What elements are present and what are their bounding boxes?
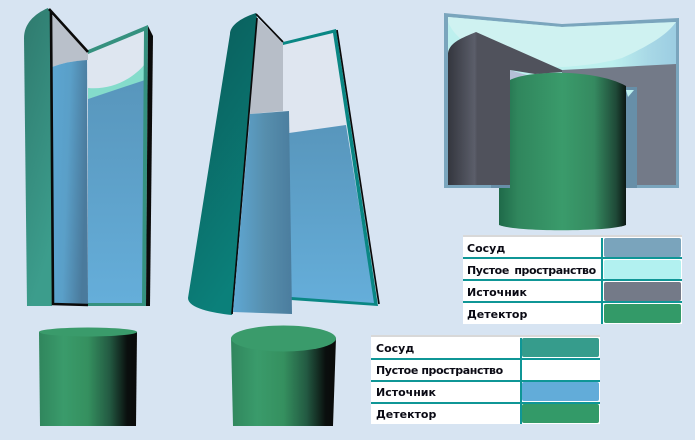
vessel outer curved wall [24,8,52,306]
source: back panel [289,125,375,304]
row: source [376,382,599,401]
vessel black edge right [146,26,153,306]
row: empty space: Пустое пространство [467,264,596,277]
source left dark [448,32,562,185]
source: front section [233,111,292,314]
vessel outer curved wall [188,13,257,315]
vessel bottom strip [491,185,510,188]
empty space: back corner [51,14,88,67]
vessel blue-grey inner strip [620,87,637,188]
detector lower body [499,188,626,230]
detector middle cylinder [231,326,336,426]
legend lower [371,335,600,424]
row: vessel [467,238,681,257]
vessel frame [283,29,378,306]
row: empty space [467,260,681,279]
detector upper body [510,73,626,188]
empty space: right panel [283,33,346,133]
source: right panel [88,80,145,303]
empty space: right panel [88,31,145,88]
source: front curved section [52,60,88,304]
empty space sliver [626,90,634,97]
row: vessel [376,338,599,357]
detector left cylinder [39,328,137,426]
legend upper [463,235,682,324]
source right [562,64,676,185]
vessel black edges [49,9,88,305]
figure: right view with detector [444,13,679,230]
vessel frame right [88,25,148,306]
row: vessel: Сосуд [376,342,414,355]
row: detector [376,404,599,423]
row: empty space: Пустое пространство [376,364,503,377]
vessel crescent [88,64,145,99]
vessel inner [448,17,676,185]
figure: left vessel view [24,8,153,306]
row: detector: Детектор [467,308,527,321]
row: source [467,282,681,301]
lavender sliver [510,70,530,82]
row: source: Источник [376,386,436,399]
empty space: back corner [250,18,283,114]
row: detector [467,304,681,323]
vessel black edges [232,14,379,314]
figure: middle vessel view [188,13,379,315]
row: vessel: Сосуд [467,242,505,255]
vessel frame [444,13,679,188]
row: source: Источник [467,286,527,299]
row: detector: Детектор [376,408,436,421]
empty space [448,17,676,67]
